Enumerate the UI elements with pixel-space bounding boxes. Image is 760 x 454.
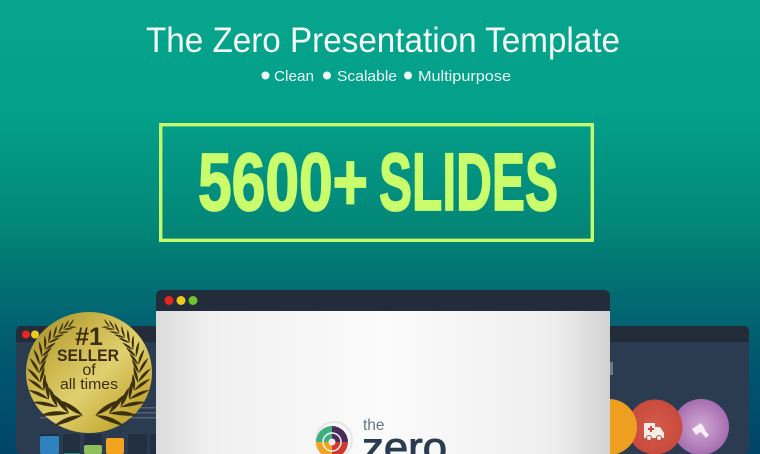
logo: the zero: the: [363, 417, 385, 434]
badge text: SELLER: [57, 346, 119, 365]
feature list: Multipurpose: [418, 68, 511, 85]
panel: main slide window: [156, 290, 610, 454]
badge text: of: [82, 362, 96, 379]
blurred caption lines: [40, 407, 156, 418]
icon circle: gavel: [673, 399, 729, 454]
panel: left slide window: [16, 326, 166, 454]
headline box: 5600+ slides: 5600+: [198, 137, 368, 228]
headline box: 5600+ slides: SLIDES: [379, 137, 558, 228]
logo mark: [316, 422, 352, 454]
title: The Zero Presentation Template: [146, 21, 620, 60]
laurel wreath: [27, 319, 151, 430]
icon circle: ambulance: [628, 400, 682, 454]
badge text: [57, 323, 119, 393]
bar chart: [40, 434, 156, 454]
badge: #1 seller of all times: [26, 312, 152, 433]
panel: right slide window: [581, 326, 749, 454]
badge text: #1: [75, 323, 103, 351]
feature list: [262, 68, 511, 85]
clipped heading fragment: [610, 362, 613, 375]
badge text: all times: [60, 376, 118, 393]
orange circle: [581, 399, 637, 454]
feature list: Scalable: [337, 68, 397, 85]
headline box: 5600+ slides: [161, 125, 592, 240]
feature list: Clean: [274, 68, 314, 85]
logo: the zero: [316, 417, 447, 454]
